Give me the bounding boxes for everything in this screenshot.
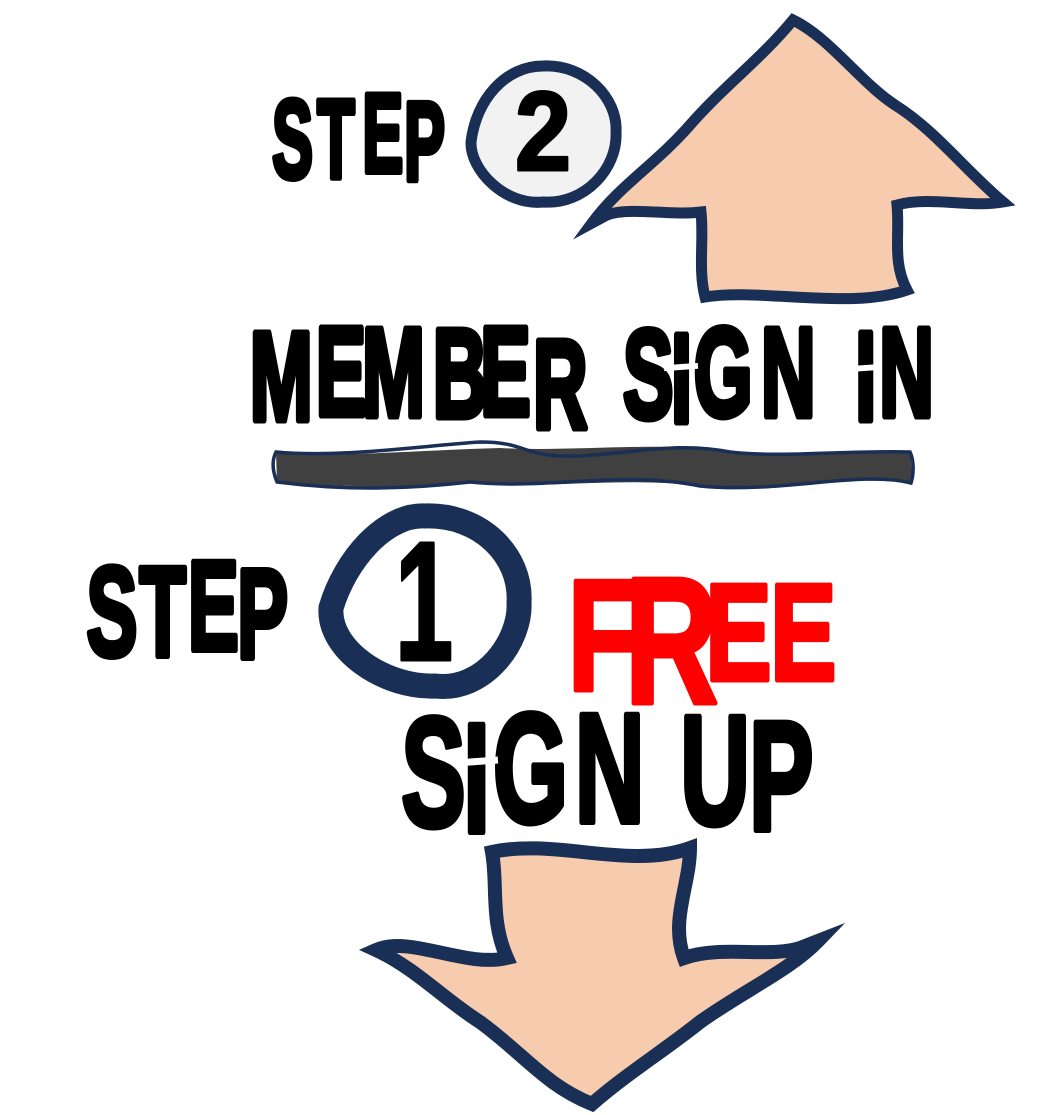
label: free (568, 541, 836, 742)
gap in the letter I (456, 757, 498, 766)
divider bar (273, 442, 913, 488)
badge: number 2 (471, 66, 616, 202)
heading: sign up: SIGN UP (401, 681, 814, 866)
label: free: F (568, 548, 637, 724)
arrow: down to sign up (376, 848, 818, 1104)
label: step 2: STEP (272, 72, 445, 205)
gaps in the letter I (664, 363, 882, 372)
label: free: R (625, 541, 718, 742)
badge: number 1 (331, 506, 519, 696)
badge: number 2: 2 (515, 69, 571, 194)
arrow: up to member sign in (592, 20, 1003, 299)
badge: number 1: 1 (395, 506, 453, 696)
label: free: EE (705, 556, 836, 710)
label: step 1: STEP (86, 535, 288, 686)
heading: member sign in: MEMBER SIGN IN (250, 302, 934, 456)
